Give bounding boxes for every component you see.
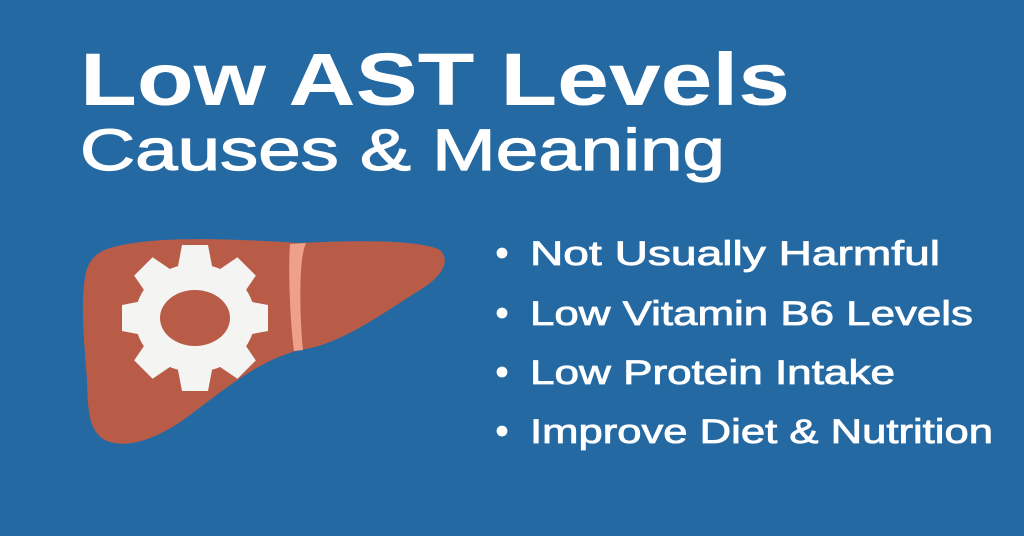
bullet list: Low Protein Intake [530,354,895,392]
subtitle: Causes & Meaning [80,118,725,183]
bullet list: Improve Diet & Nutrition [530,413,993,451]
bullet list [497,235,993,451]
title: Low AST Levels [80,38,790,121]
icon: liver with gear [83,239,445,444]
bullet list: Not Usually Harmful [530,235,940,273]
bullet list: Low Vitamin B6 Levels [530,295,973,333]
liver band [289,243,306,351]
icon: gear [122,245,268,391]
